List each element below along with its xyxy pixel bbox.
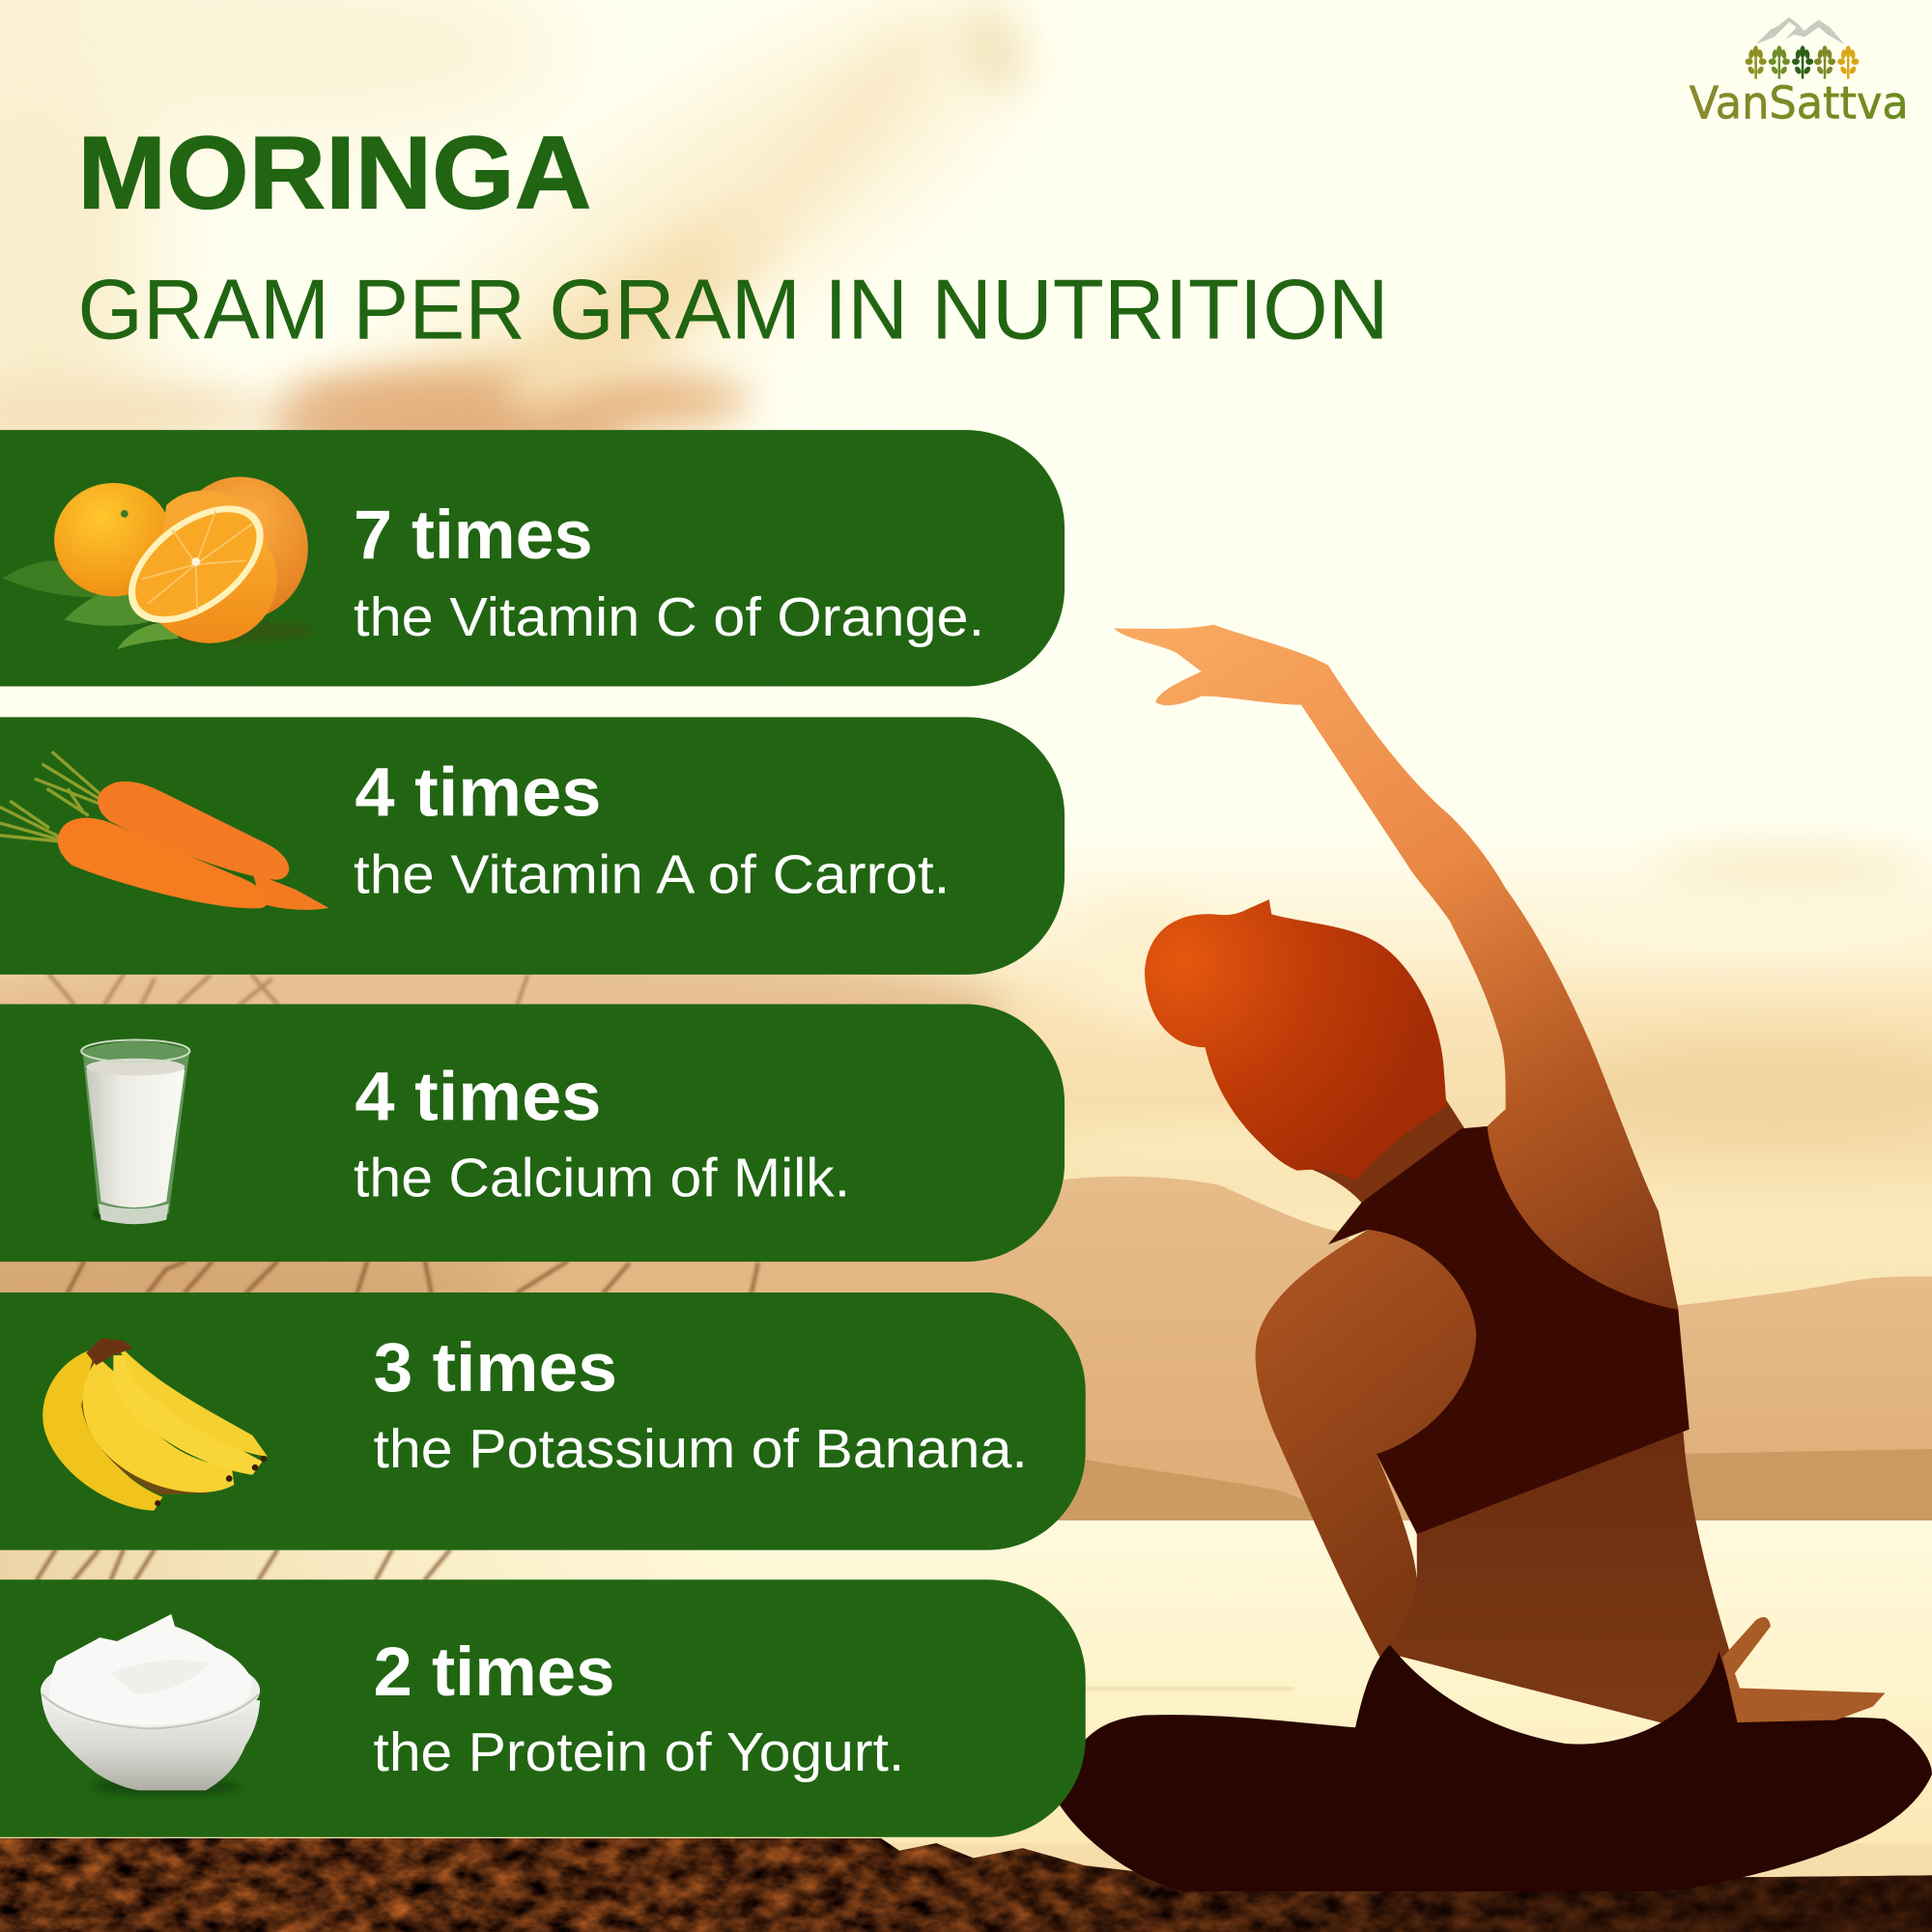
title: MORINGA (77, 115, 591, 231)
neck (1293, 1096, 1466, 1203)
icon: bowl of yogurt (41, 1614, 260, 1795)
panel: yogurt row (0, 1579, 1086, 1837)
text: vitamin A: the Vitamin A of Carrot. (354, 844, 950, 905)
raised arm, shoulder and back (1114, 625, 1731, 1737)
panel: banana row (0, 1293, 1086, 1550)
panel: milk row (0, 1005, 1065, 1262)
icon: oranges (3, 477, 314, 649)
panel: orange row (0, 430, 1065, 686)
hand on knee (1722, 1617, 1886, 1722)
icon: bananas (43, 1338, 268, 1511)
arm behind back (1256, 1230, 1476, 1658)
hair and bun (1145, 899, 1446, 1180)
text: protein: the Protein of Yogurt. (373, 1721, 904, 1782)
sports bra (1328, 1126, 1690, 1534)
wordmark: VanSattva (1690, 76, 1909, 128)
woman in yoga side-stretch silhouette (1060, 625, 1932, 1891)
background: lake water (0, 1520, 1932, 1843)
subtitle: GRAM PER GRAM IN NUTRITION (77, 262, 1388, 357)
heading: 4 times: 4 times (355, 753, 601, 831)
background: distant mountains (0, 1177, 1932, 1521)
icon: five trees (1746, 45, 1859, 79)
panel: carrot row (0, 717, 1065, 975)
logo: VanSattva (1690, 17, 1909, 128)
icon: glass of milk (81, 1040, 189, 1224)
heading: 3 times: 3 times (373, 1329, 617, 1406)
heading: 7 times: 7 times (354, 497, 593, 574)
icon: carrots (0, 752, 329, 910)
icon: mountains (1756, 17, 1844, 44)
background: dry grass twigs (37, 975, 757, 1579)
text: vitamin C: the Vitamin C of Orange. (354, 586, 984, 647)
leggings (1060, 1645, 1932, 1891)
lower back (1380, 1430, 1731, 1737)
ground: rocky shore (0, 1833, 1932, 1932)
text: potassium: the Potassium of Banana. (373, 1418, 1028, 1479)
heading: 4 times: 4 times (355, 1058, 601, 1135)
text: calcium: the Calcium of Milk. (354, 1148, 850, 1208)
heading: 2 times: 2 times (373, 1634, 614, 1711)
